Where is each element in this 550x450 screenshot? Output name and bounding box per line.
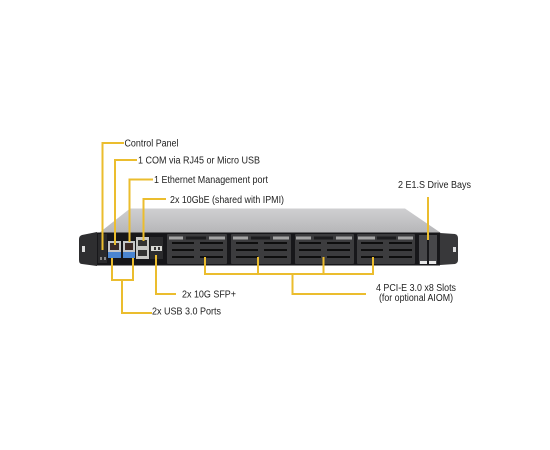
leader: 10G SFP+ <box>156 255 176 294</box>
label: PCI-E slots: (for optional AIOM) <box>379 293 453 304</box>
left rack ear <box>79 232 97 266</box>
chassis top cover <box>99 208 441 233</box>
label: USB 3.0: 2x USB 3.0 Ports <box>152 306 221 318</box>
label: PCI-E slots <box>376 283 456 304</box>
label: COM: 1 COM via RJ45 or Micro USB <box>138 156 260 166</box>
label: PCI-E slots: 4 PCI-E 3.0 x8 Slots <box>376 283 456 294</box>
chassis front panel <box>97 232 440 266</box>
right rack ear <box>440 233 458 265</box>
leader: E1.S drive bays <box>427 197 429 240</box>
rear I/O ports <box>98 234 163 263</box>
E1.S drive bays <box>419 235 437 264</box>
leader: USB 3.0 <box>112 258 152 313</box>
drive bay 4 <box>357 234 415 264</box>
drive bay 2 <box>231 234 291 264</box>
drive bay 1 <box>167 234 227 264</box>
label: 10GbE: 2x 10GbE (shared with IPMI) <box>170 195 284 206</box>
server chassis <box>79 208 458 266</box>
drive bay 3 <box>295 234 354 264</box>
leader: Ethernet management <box>130 180 153 242</box>
label: E1.S: 2 E1.S Drive Bays <box>398 180 471 191</box>
label: control panel: Control Panel <box>124 138 178 150</box>
label: 10G SFP+: 2x 10G SFP+ <box>182 290 236 300</box>
leader: COM port <box>115 160 137 245</box>
label: Ethernet: 1 Ethernet Management port <box>154 175 268 186</box>
leader: 10GbE <box>144 199 166 241</box>
leader: PCI-E slots <box>205 257 373 294</box>
leader: control panel <box>102 143 124 250</box>
